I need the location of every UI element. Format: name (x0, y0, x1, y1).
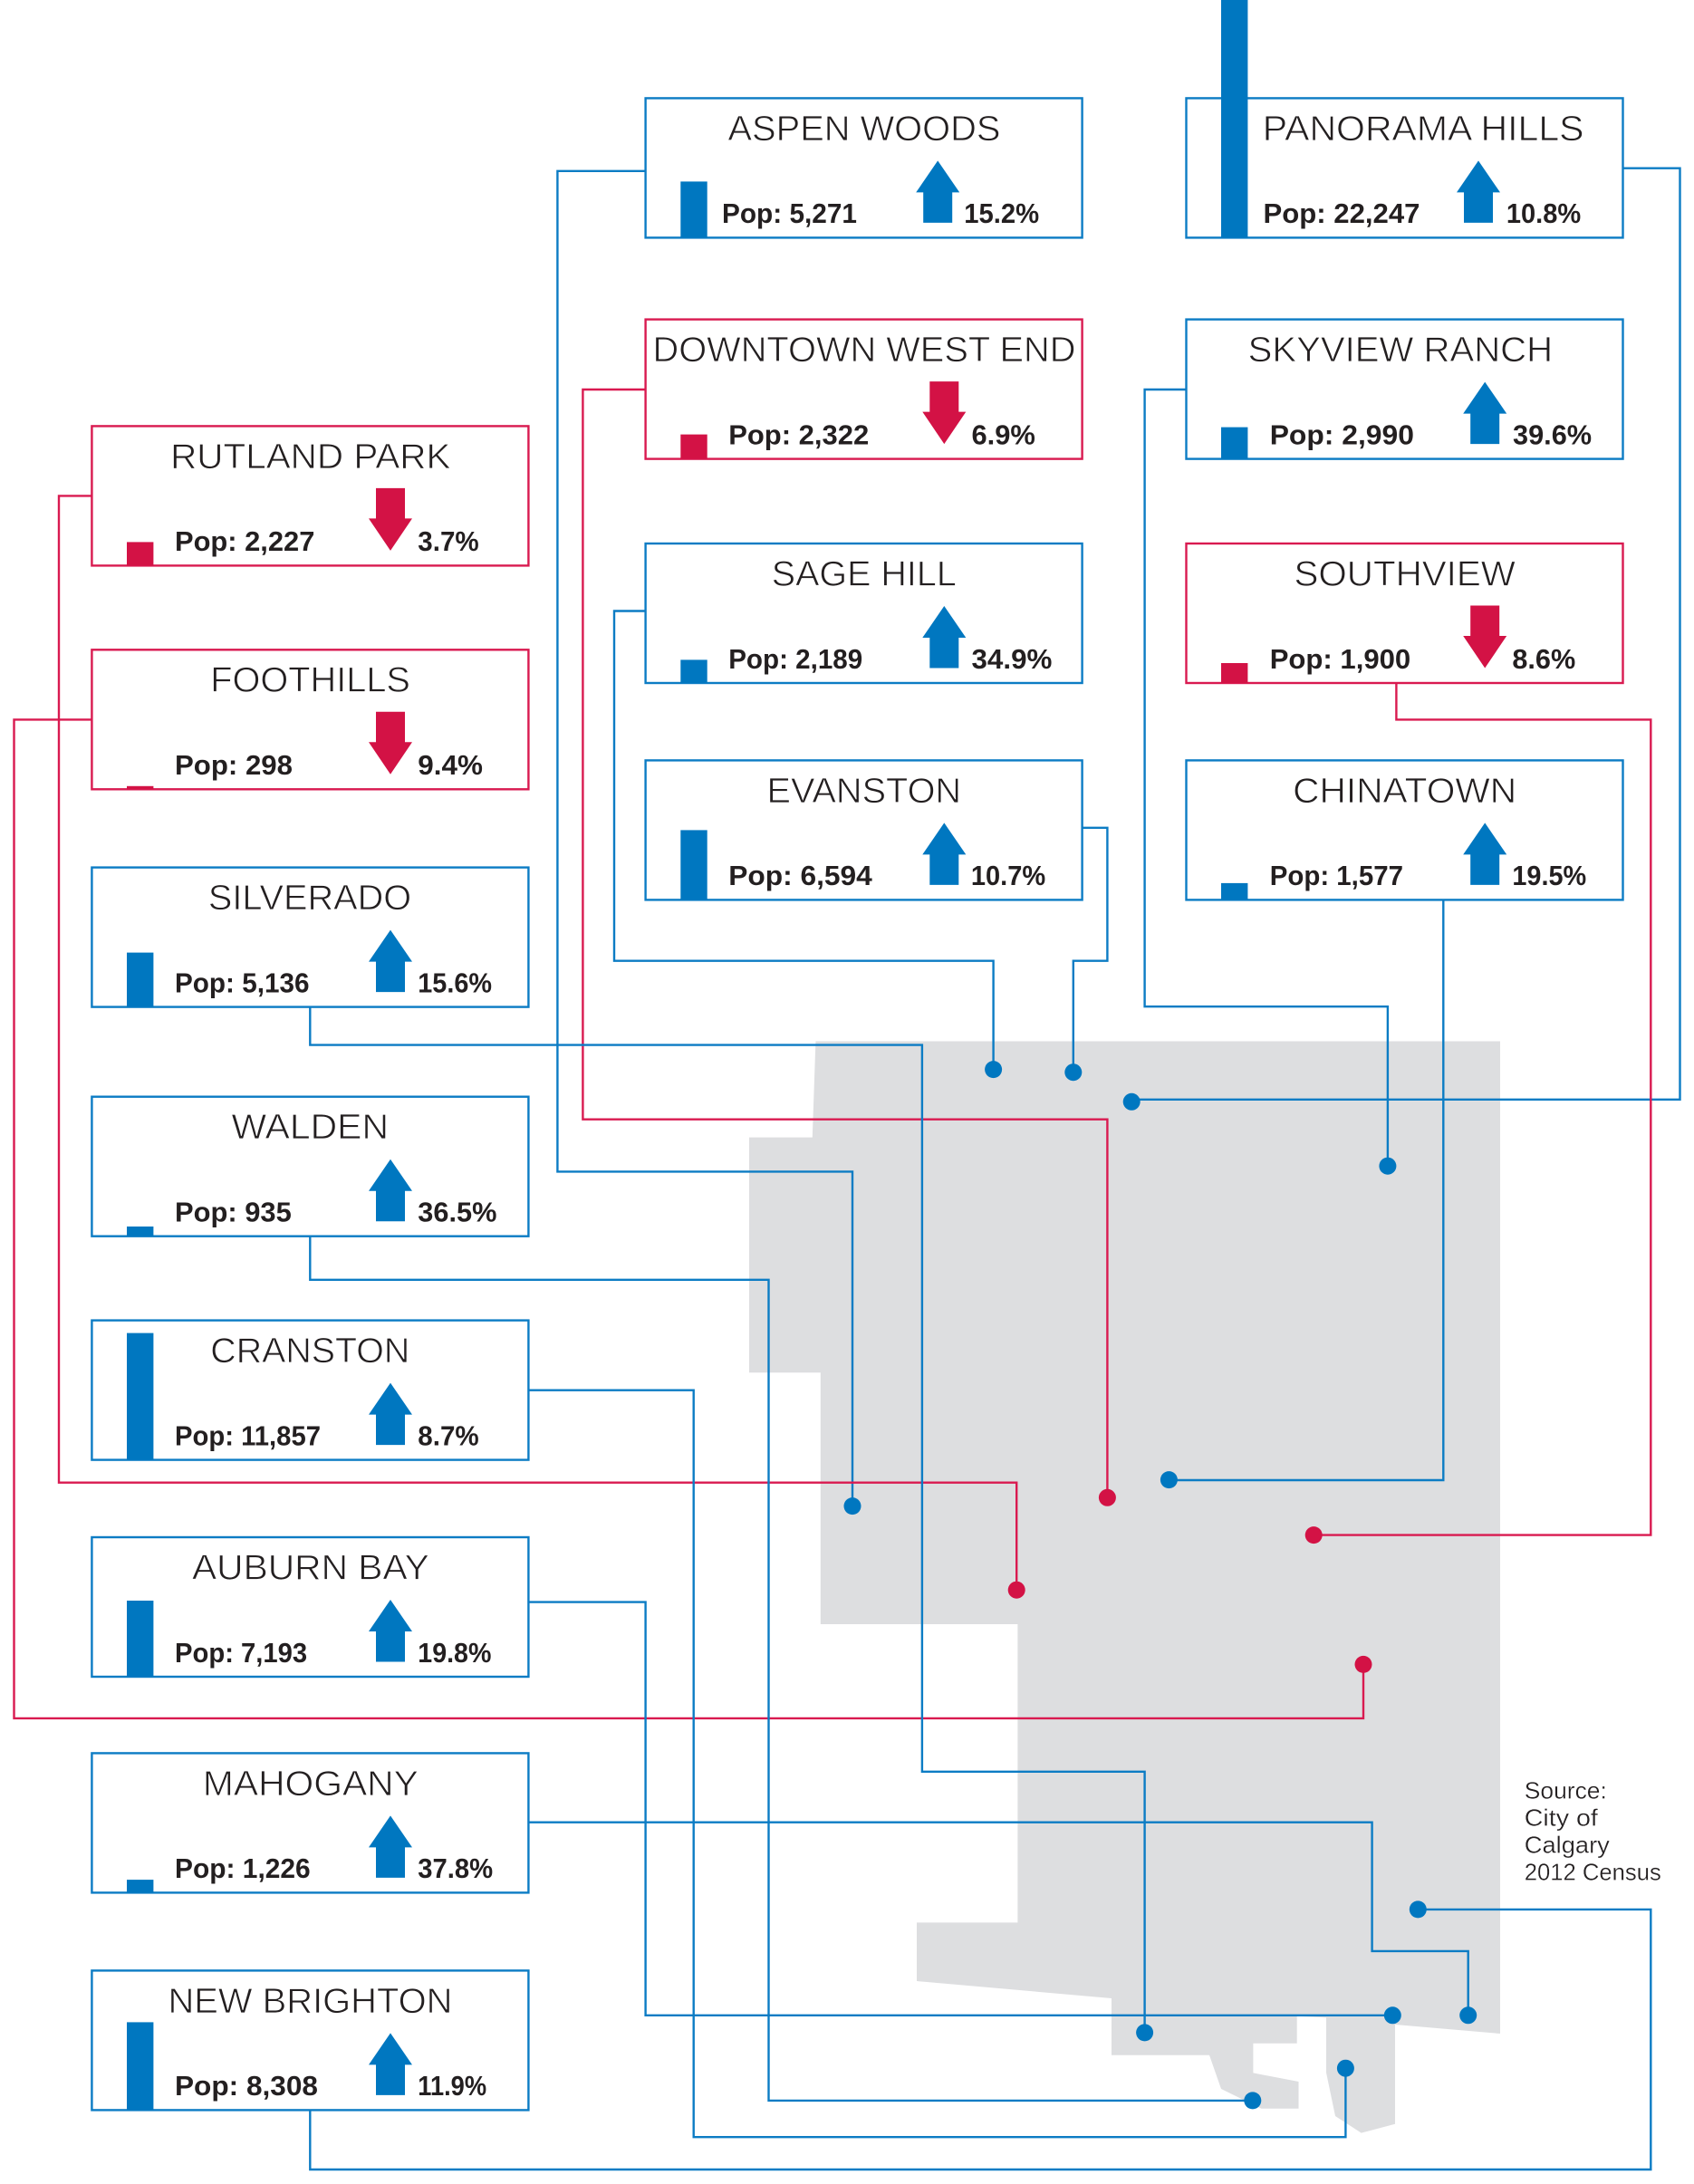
panel: Foothills (91, 649, 528, 789)
panel: Chinatown (1187, 760, 1623, 900)
population bar (680, 181, 707, 237)
panel: Downtown West End (646, 320, 1083, 459)
population bar (1221, 428, 1247, 459)
heading: AUBURN BAY (192, 1548, 429, 1587)
percent change: 10.7% (971, 860, 1045, 891)
connector: Cranston (528, 1390, 1345, 2137)
population bar (1221, 0, 1247, 237)
up arrow (1463, 823, 1506, 885)
panel: Walden (91, 1097, 528, 1236)
up arrow (369, 2033, 412, 2095)
heading: SILVERADO (208, 879, 411, 918)
connector: New Brighton (310, 1910, 1651, 2170)
panel: Panorama Hills (1187, 0, 1623, 237)
connector: Foothills (14, 719, 1363, 1718)
percent change: 3.7% (418, 525, 479, 557)
panel: Aspen Woods (646, 98, 1083, 237)
population: Pop: 8,308 (175, 2070, 318, 2102)
percent change: 37.8% (418, 1852, 493, 1884)
population: Pop: 5,271 (722, 197, 857, 229)
population: Pop: 2,227 (175, 525, 314, 557)
percent change: 36.5% (418, 1196, 496, 1227)
panel: Cranston (91, 1321, 528, 1460)
source note: City of (1525, 1804, 1599, 1832)
connector: Southview (1314, 683, 1651, 1535)
population bar (1221, 883, 1247, 900)
population bar (127, 1227, 153, 1236)
population: Pop: 2,322 (728, 419, 869, 450)
heading: SAGE HILL (772, 554, 957, 593)
population: Pop: 22,247 (1264, 197, 1420, 229)
heading: EVANSTON (766, 772, 961, 811)
up arrow (922, 823, 966, 885)
heading: SKYVIEW RANCH (1248, 331, 1553, 370)
up arrow (369, 930, 412, 992)
connector: Silverado (310, 1006, 1145, 2033)
percent change: 19.5% (1512, 860, 1586, 891)
percent change: 11.9% (418, 2070, 486, 2102)
down arrow (922, 381, 966, 444)
population: Pop: 2,189 (728, 643, 862, 675)
population bar (127, 1601, 153, 1677)
percent change: 15.2% (964, 197, 1039, 229)
panel: Mahogany (91, 1753, 528, 1892)
source note (1525, 1776, 1661, 1886)
population bar (680, 435, 707, 459)
population bar (127, 2022, 153, 2110)
down arrow (369, 488, 412, 551)
connector: Evanston (1073, 828, 1107, 1073)
heading: MAHOGANY (203, 1765, 419, 1804)
up arrow (369, 1159, 412, 1221)
population bar (680, 659, 707, 683)
population bar (127, 1333, 153, 1460)
heading: DOWNTOWN WEST END (652, 331, 1075, 370)
up arrow (922, 606, 966, 669)
population: Pop: 1,226 (175, 1852, 311, 1884)
up arrow (1457, 160, 1500, 223)
heading: PANORAMA HILLS (1263, 110, 1584, 149)
population: Pop: 7,193 (175, 1637, 307, 1669)
population: Pop: 11,857 (175, 1419, 321, 1451)
panel: New Brighton (91, 1970, 528, 2110)
population: Pop: 1,900 (1270, 643, 1410, 675)
population: Pop: 298 (175, 749, 293, 781)
panel: Evanston (646, 760, 1083, 900)
connector: Mahogany (528, 1823, 1468, 2016)
connector: Aspen Woods (557, 171, 852, 1506)
percent change: 15.6% (418, 967, 492, 998)
population: Pop: 1,577 (1270, 860, 1403, 891)
heading: CHINATOWN (1293, 772, 1516, 811)
panel: Silverado (91, 868, 528, 1007)
connector: Sage Hill (614, 611, 994, 1070)
percent change: 9.4% (418, 749, 483, 781)
up arrow (369, 1383, 412, 1445)
connector: Skyview Ranch (1145, 390, 1388, 1166)
down arrow (369, 712, 412, 775)
panel: Southview (1187, 544, 1623, 683)
panel: Sage Hill (646, 544, 1083, 683)
map location dots (844, 1061, 1477, 2109)
population bar (127, 1880, 153, 1892)
population bar (1221, 663, 1247, 683)
population: Pop: 2,990 (1270, 419, 1414, 450)
source note: Source: (1525, 1776, 1607, 1804)
up arrow (369, 1815, 412, 1878)
percent change: 19.8% (418, 1637, 491, 1669)
panel: Auburn Bay (91, 1537, 528, 1677)
down arrow (1463, 605, 1506, 669)
percent change: 39.6% (1513, 419, 1592, 450)
percent change: 34.9% (971, 643, 1052, 675)
percent change: 8.6% (1512, 643, 1575, 675)
heading: CRANSTON (210, 1332, 409, 1371)
population: Pop: 5,136 (175, 967, 310, 998)
heading: FOOTHILLS (210, 661, 410, 700)
population: Pop: 6,594 (728, 860, 873, 891)
source note: 2012 Census (1525, 1859, 1661, 1886)
panel: Skyview Ranch (1187, 320, 1623, 459)
connector: Chinatown (1169, 900, 1443, 1480)
connector: Panorama Hills (1131, 168, 1680, 1100)
heading: ASPEN WOODS (727, 110, 1000, 149)
percent change: 8.7% (418, 1419, 479, 1451)
connector: Rutland Park (59, 495, 1016, 1590)
percent change: 6.9% (971, 419, 1035, 450)
connector: Walden (310, 1236, 1253, 2101)
source note: Calgary (1525, 1832, 1610, 1859)
population bar (680, 830, 707, 900)
up arrow (916, 160, 959, 223)
population: Pop: 935 (175, 1196, 292, 1227)
panel: Rutland Park (91, 426, 528, 565)
up arrow (369, 1600, 412, 1661)
heading: RUTLAND PARK (170, 438, 450, 476)
connector: Downtown West End (582, 390, 1107, 1497)
heading: WALDEN (232, 1108, 389, 1147)
heading: SOUTHVIEW (1294, 554, 1516, 593)
up arrow (1463, 382, 1506, 444)
connector: Auburn Bay (528, 1602, 1392, 2016)
population bar (127, 953, 153, 1007)
percent change: 10.8% (1506, 197, 1581, 229)
heading: NEW BRIGHTON (168, 1982, 453, 2021)
population bar (127, 786, 153, 789)
map: city of Calgary silhouette (749, 1042, 1500, 2133)
population bar (127, 542, 153, 565)
